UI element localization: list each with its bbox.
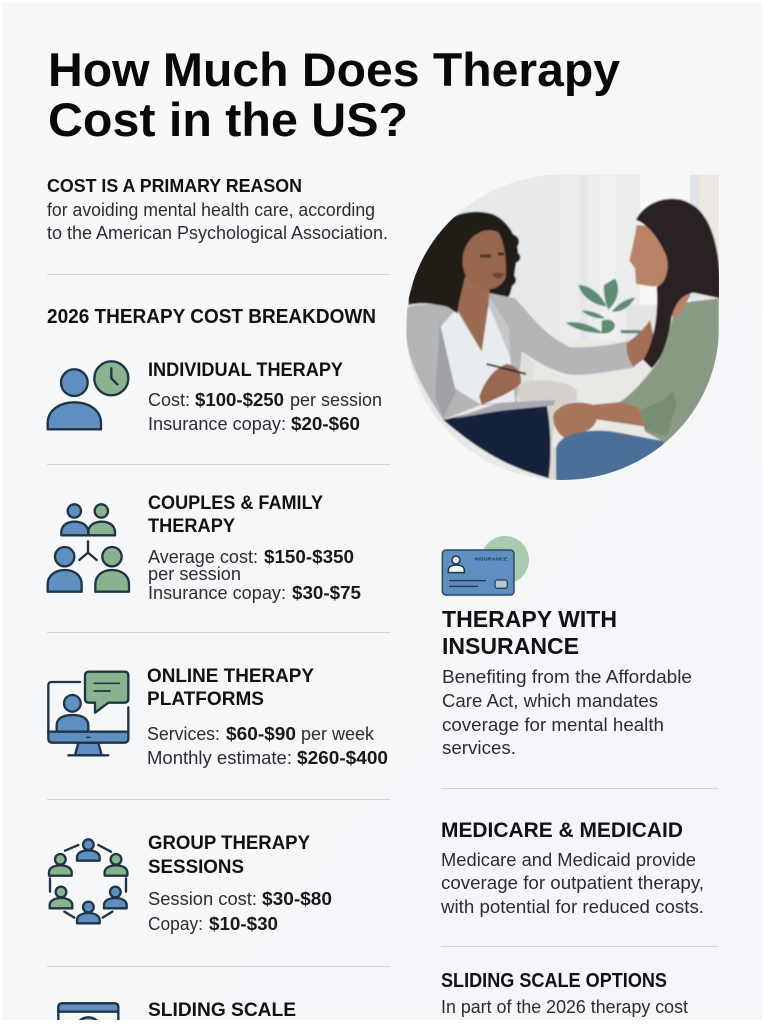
icon: people in a circle [49,839,127,923]
panel: sliding scale options: In part of the 2026 therapy cost [441,997,688,1017]
panel: therapy with insurance: Benefiting from the Affordable [442,667,692,687]
text: group therapy sessions: GROUP THERAPY [148,833,310,854]
intro text block: COST IS A PRIMARY REASON [47,176,302,196]
panel: medicare and medicaid: MEDICARE & MEDICAID [441,819,683,842]
icon: person with clock [48,361,128,429]
panel: online therapy platforms [48,666,388,768]
text: individual therapy: per session [290,390,382,410]
text: online therapy platforms: $60-$90 [226,724,296,744]
panel: sliding scale options [441,970,688,1017]
text: couples and family therapy: per session [148,564,241,584]
text: couples and family therapy [148,493,361,603]
panel: therapy with insurance: services. [442,738,516,758]
text: couples and family therapy: Insurance copay: [148,583,286,603]
panel: couples and family therapy [48,493,361,603]
panel: sliding scale options: SLIDING SCALE OPTIONS [441,970,667,992]
intro text block [47,176,388,243]
therapist blouse [441,305,515,404]
text: online therapy platforms: $260-$400 [297,748,388,768]
client hand on shoulder [627,320,657,367]
panel: therapy with insurance: INSURANCE [442,633,579,659]
therapist hand [479,364,521,405]
text: online therapy platforms [147,666,388,768]
clipboard [453,400,555,418]
panel: medicare and medicaid [440,819,704,917]
text: individual therapy: Cost: [148,390,190,410]
panel: medicare and medicaid: coverage for outpatient therapy, [441,873,704,893]
text: couples and family therapy: COUPLES & FAMILY [148,493,323,514]
icon: sliding scale window [58,1003,118,1024]
text: individual therapy: $20-$60 [291,414,360,434]
plant [566,278,641,333]
intro text block: to the American Psychological Association. [47,223,388,243]
panel: therapy with insurance [442,606,692,758]
panel: sliding scale [58,1000,296,1024]
chair [515,380,577,447]
title: Cost in the US? [48,93,408,146]
text: online therapy platforms: Monthly estimate: [147,748,292,768]
icon: insurance card [442,536,529,595]
panel: medicare and medicaid: with potential for reduced costs. [440,897,704,917]
text: online therapy platforms: PLATFORMS [147,689,264,710]
text: group therapy sessions: Session cost: [148,889,257,909]
panel: therapy with insurance: Care Act, which mandates [442,691,658,711]
panel: group therapy sessions [49,833,332,934]
text: group therapy sessions: SESSIONS [148,857,244,878]
icon: insurance card: INSURANCE [474,557,508,563]
photo: therapist comforting client [400,170,730,490]
therapist pants [443,405,551,478]
intro text block: for avoiding mental health care, according [47,200,375,220]
therapist hair [407,212,520,313]
title: How Much Does Therapy [48,43,620,96]
text: individual therapy [148,360,382,434]
text: group therapy sessions [148,833,332,934]
therapist jacket [406,293,635,420]
text: couples and family therapy: $150-$350 [264,547,354,567]
therapist curls over shoulder [448,303,459,314]
jeans [556,431,667,485]
client arm and hands [592,400,645,427]
text: couples and family therapy: $30-$75 [292,583,361,603]
text: couples and family therapy: Average cost: [148,547,258,567]
text: online therapy platforms: per week [301,724,375,744]
section heading: cost breakdown: 2026 THERAPY COST BREAKDOWN [47,306,376,328]
panel: medicare and medicaid: Medicare and Medicaid provide [441,850,696,870]
panel: individual therapy [48,360,382,434]
text: couples and family therapy: THERAPY [148,516,235,537]
text: individual therapy: $100-$250 [195,390,284,410]
text: group therapy sessions: Copay: [148,914,203,934]
icon: couples and family [48,504,129,592]
text: individual therapy: Insurance copay: [148,414,286,434]
heading: sliding scale: SLIDING SCALE [148,1000,296,1021]
client shirt [620,297,719,444]
text: group therapy sessions: $10-$30 [209,914,278,934]
client face and neck [629,225,693,318]
panel: therapy with insurance: THERAPY WITH [442,606,617,632]
text: online therapy platforms: ONLINE THERAPY [147,666,314,687]
client hair [636,199,720,368]
panel: therapy with insurance: coverage for mental health [442,715,664,735]
therapist face [463,230,506,289]
icon: computer with chat bubble [48,672,128,755]
text: group therapy sessions: $30-$80 [262,889,332,909]
therapist neck and chest [457,277,491,352]
text: individual therapy: INDIVIDUAL THERAPY [148,360,343,381]
text: online therapy platforms: Services: [147,724,220,744]
title [48,43,620,146]
